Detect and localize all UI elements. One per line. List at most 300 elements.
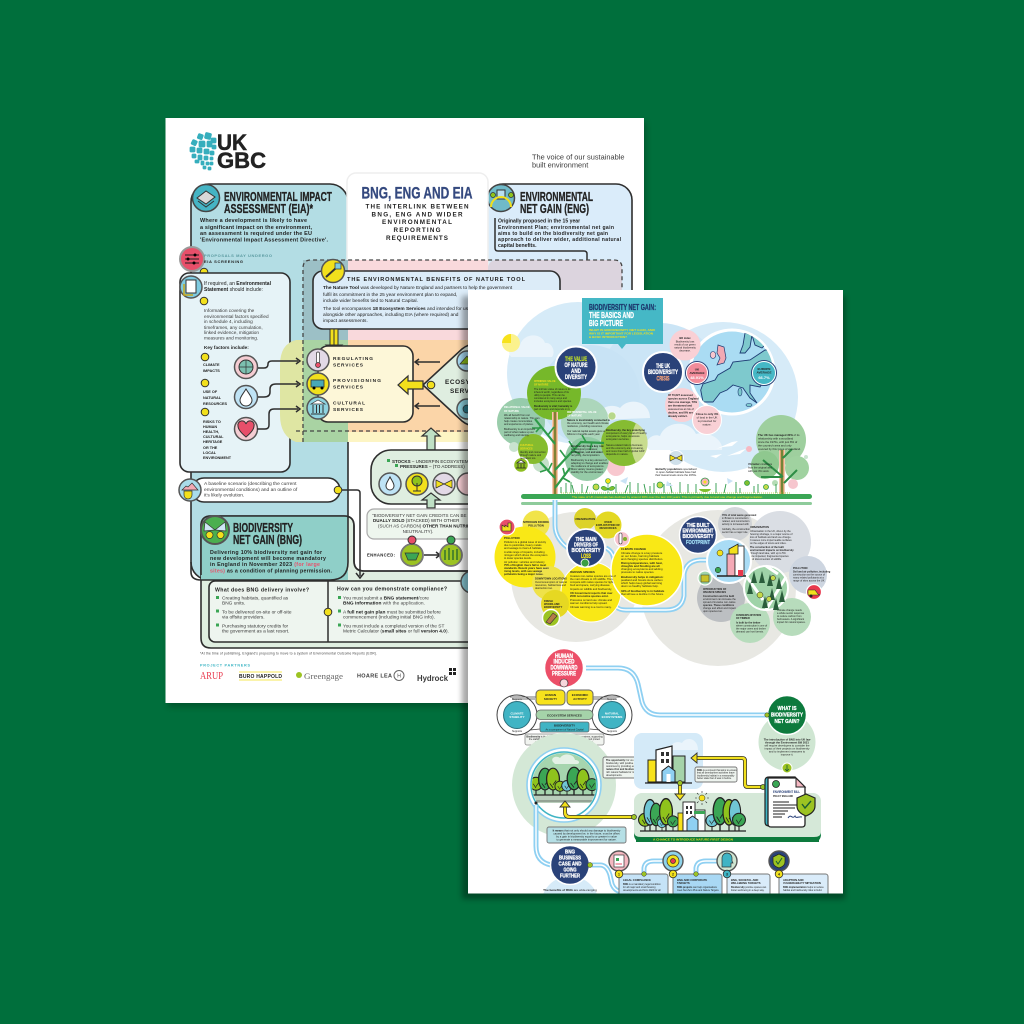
tree: value of nature circles: depends on nature. [606,452,629,456]
text: footprint: and disconnection of wildlife. [750,558,782,561]
heading: BNG [233,520,302,547]
text: drivers: Overconsumption of natural [535,580,567,584]
card: BNG, societal and wellbeing targets: foster well-being in a deep way. [731,889,765,892]
card: BNG and corporate targets: meet Net Zero Plus and Nature Targets. [677,889,720,892]
text: drivers: BIODIVERSITY [544,605,563,609]
text: natural value of nature: utility to people. This can be [534,394,566,397]
callout: credits note: "BIODIVERSITY NET GAIN CREDITS CAN BE [372,513,466,518]
card: legal compliance: BNG is a mandatory legal condition [623,883,661,886]
grey footprint circles [697,507,827,643]
note: biodiversity: the stability of ecosystem services which in turn sustain and protect [529,738,600,741]
text: drivers: peatland and forests store carbon [621,578,663,582]
tree: value of nature circles: Our natural capital assets give us [567,429,606,433]
yellow driver circles [494,508,683,622]
grass and flowers [561,477,790,493]
heading circle: the UK biodiversity crisis: CRISIS [656,376,670,382]
text: baseline: environmental conditions) and an outline of [204,487,298,493]
tree: value of nature circles: We all benefit from our [504,413,530,417]
column: what does BNG delivery involve: the government as a last resort. [222,628,289,634]
text: ENG intro: Environment Plan; environmental net gain [498,225,614,231]
text: statement detail: measures and monitoring. [204,336,258,340]
subtitle: THE INTERLINK BETWEEN [366,204,469,210]
callout: it means [547,827,626,843]
text: footprint: It causes more impermeable surfaces [750,539,792,542]
tree: value of nature circles: ecosystems, helps us access [606,434,640,438]
heading circle: BNG business case and going further: FURTHER [560,874,581,880]
icon: logging [542,610,560,626]
factor: health and heritage: LOCAL [203,451,217,455]
tree: UK managed: The UK has managed 30% of its [758,433,800,437]
text: statement detail: Information covering the [204,308,255,313]
section: value of nature and UK crisis [497,298,812,505]
text: drivers: EXPLOITATION OF [596,523,620,527]
title box: & BASIC INTRODUCTION? [589,335,627,339]
icon: wellbeing head: 3 [726,872,728,876]
logo: UKGBC: GBC [217,148,266,173]
title box: THE BASICS AND [589,310,634,320]
text: drivers: 75% of English rivers fail to meet [504,563,546,567]
text: stocks [387,459,472,469]
text: footprint: Soil and air pollution, including [793,570,831,574]
text: ENG intro: capital benefits. [498,243,537,249]
panel: environmental net gain [488,183,633,290]
tagline [532,154,624,168]
explainer: what is BNG: will require developers to consider the [764,744,810,748]
text: footprint: where construction is one of [736,624,767,628]
heading: EIA: ENVIRONMENTAL IMPACT [224,190,332,204]
ring: climate stability: Supports [512,730,523,733]
heading: BNG: BIODIVERSITY [233,520,293,535]
ring: climate stability: Supports [512,698,523,701]
text: footprint: Climate change needs [777,609,803,612]
text: footprint [703,514,831,634]
tree: value of nature circles: Biodiversity has a key role [571,444,604,448]
text: EIA intro: an assessment is required under the EU [200,231,312,237]
column: how can you demonstrate compliance: You must include a completed version of the ST [343,624,444,630]
text: drivers: Climate change is a key pressure [621,551,663,555]
diagram: enhanced habitats [367,536,462,566]
text: drivers: RESOURCES [599,526,617,530]
tree: value of nature circles: More variety means greater [571,467,603,471]
explainer: what is BNG: through the Environment Bill 2021 [765,740,809,744]
connector dot [334,486,342,494]
service: provisioning: PROVISIONING [333,378,381,384]
text: butterfly population [655,467,697,477]
text: footprint: the major users and timber [736,628,766,630]
text: footprint: sector has a major role. [722,531,748,534]
text: drivers: DOWNTOWN LOCATIONS [535,576,567,580]
partner logos: HOARE LEA [357,674,392,680]
tree: value of nature circles: resilience, providing resources. [567,424,603,428]
heading: project partners: PROJECT PARTNERS [200,664,250,668]
text: footprint: to reduce carbon from [777,615,801,618]
text: BNG intro: in England in November 2023 (for large [210,562,320,568]
text: statement detail [204,308,269,350]
heading circle: human induced downward pressure: DOWNWARD [550,666,578,672]
text: EIA intro: a significant impact on the environment, [200,225,312,231]
text: drivers [504,517,665,609]
text: butterfly population: Butterfly populations specialised [655,467,697,471]
river: blue pipes [555,500,710,610]
service: regulating [307,349,373,371]
factor: natural resources: NATURAL [203,396,222,400]
heading circle: human induced downward pressure [544,648,584,688]
text: drivers: FRESH [544,599,553,603]
service: regulating: SERVICES [333,362,364,368]
text: statement intro: Statement should include: [204,287,263,293]
arrows: small feedback [415,359,440,409]
heading circle: built environment footprint [680,516,716,554]
panel: nature-first banner: A CHANCE TO INTRODUCE NATURE-FIRST DESIGN [653,838,733,842]
factor: natural resources [201,379,258,408]
heading: ENG [520,190,593,216]
box: ecosystem services: ECOSYSTEM SERVICES [547,714,582,718]
clouds [509,335,722,450]
text: footprint: range of sites across the UK [793,580,825,582]
text: drivers: to lower species levels. [504,556,532,560]
explainer: what is BNG: and to implement measures to [769,750,806,754]
text: nature tool: The Nature Tool was developed by Nature England and partners to help the government [323,285,513,291]
heading circle: built environment footprint: FOOTPRINT [686,540,711,546]
panel: environmental statement [180,273,290,472]
column: what does BNG delivery involve: Creating habitats, quantified as [222,596,289,602]
text: natural value of nature: inherent worth, regardless of its [534,391,570,394]
subtitle: ENVIRONMENTAL [382,219,452,226]
card: adaption and vulnerability mitigation: BNG implementation helps to reduce [783,886,824,889]
stat: UK average [686,362,708,384]
facts: pink circles: already extinct. [668,414,688,418]
facts: pink circles: nature. [703,422,712,426]
icon: tractor [806,584,822,600]
text: footprint: Is built by the timber [736,622,760,624]
heading circle: BNG business case and going further: CASE AND [558,862,582,868]
text: footprint: Urbanisation in the UK, driven by the [750,530,791,533]
service: provisioning: SERVICES [333,384,364,390]
column: how can you demonstrate compliance: How can you demonstrate compliance? [337,586,447,592]
icon: sun [502,334,520,352]
tree: value of nature circles: Identity and connection [520,451,546,454]
panel: report title [347,173,488,273]
icon: screening sliders [180,247,204,271]
explainer: what is BNG: The introduction of BNG into UK law [764,738,811,742]
text: drivers: WOODLAND [544,602,560,606]
text: nature tool: fulfil its commitment in the 25 year environment plan to expand, [323,292,457,298]
zone: nature tool overlap regions [280,260,622,442]
callout: the opportunity: biodiversity, with positive [606,762,634,765]
tree: value of nature circles: Biodiversity is an important [504,427,535,431]
card: BNG and corporate targets [642,851,722,896]
text: drivers: due to pesticides, heavy metals [504,543,542,547]
card: BNG, societal and wellbeing targets: WELLBEING TARGETS [731,881,761,885]
panel: biodiversity net gain [191,516,490,648]
text: drivers: Climate warming is a cost to many. [570,605,612,609]
heading: ENG: ENVIRONMENTAL [520,190,593,204]
tree: value of nature circles: ecosystem services. [606,437,630,441]
text: ENG intro: Originally proposed in the 15 year [498,218,580,224]
backdrop: grey circles [511,510,796,666]
box: human society [536,690,565,705]
tagline: The voice of our sustainable [532,152,624,162]
logo: UKGBC: UK [217,130,247,155]
text: BNG intro: sites) as a condition of planning permission. [210,568,333,574]
heading: ENG: NET GAIN (ENG) [520,202,589,216]
partner logos: Greengage [304,671,343,681]
title box: WHY IS IT IMPORTANT FOR LEGISLATION [589,332,653,336]
page: BNG, ENG and EIA poster [166,118,644,703]
tree: UK managed: since the 1970s, with just 8% of [758,440,797,444]
text: drivers: and changing species distribution. [621,557,663,561]
icon: factory [499,519,515,535]
text: drivers: Impacts on wildlife and biodiversity, [570,587,612,591]
card: BNG and corporate targets: BNG AND CORPORATE [677,878,707,882]
facts: pink circles: result of our green [674,342,696,346]
text: statement detail: linked evidence, mitigation [204,330,259,335]
stat: Europe average: 66.7% [758,375,770,380]
text: footprint: The construction of the built [750,546,784,549]
callout: credits note: NEUTRALITY). [403,529,433,534]
callout: the opportunity: The opportunity: for us and [606,759,638,762]
text: footprint: POLLUTION [793,567,808,570]
heading circle: main drivers of biodiversity loss: BIODIVERSITY [572,548,601,554]
heading circle: what is biodiversity net gain [765,696,806,734]
text: drivers: and sewage to rivers & habitats. [504,546,542,550]
facts: pink circles [665,330,722,434]
ring: climate stability: CLIMATE [510,712,524,716]
text: ENG intro [498,218,622,249]
facts: pink circles: Close to only 3% [696,412,719,416]
arrow: stocks from credits [422,493,440,508]
heading: nature tool: THE ENVIRONMENTAL BENEFITS OF NATURE TOOL [347,277,526,283]
text: footprint: OF TIMBER [736,617,750,620]
tree: UK managed: covered by this types of woodland. [758,447,801,451]
heading circle: BNG business case and going further [550,846,592,884]
tree: value of nature circles: Nature-related risks to business [606,443,643,447]
ring: climate stability [497,695,537,735]
heading circle: main drivers of biodiversity loss: THE MAIN [576,537,596,543]
document: environment bill: POLICY ENGLAND [773,794,794,798]
connector dot [427,381,435,389]
text: baseline [204,481,298,498]
text: drivers: changing ecosystems and adding [621,567,663,571]
section: BNG business case [541,846,828,934]
heading circle: main drivers of biodiversity loss: LOSS [581,554,591,560]
tree: UK managed: relationship with a woodland [758,436,794,440]
service: provisioning [307,373,381,395]
icon: compliance [461,571,483,593]
column: what does BNG delivery involve: via offsite providers. [222,614,265,620]
panel: stocks and pressures [371,450,491,504]
text: butterfly population: in open-habitat habitats have had [656,470,696,474]
text: footprint: INVASIVE SPECIES [703,591,726,594]
callout: credits note: (SUCH AS CARBON) OTHER THAN NUTRIENT [378,524,476,528]
callout: BNG is a concept: biodiversity habitat in a measurably [697,774,735,777]
facts: pink circles: assessed as at risk of [668,407,694,411]
subtitle: REPORTING [394,227,441,234]
facts: pink circles: is protected for [698,419,716,423]
text: butterfly population: their lowest levels since the 1970s. [655,473,697,477]
text: natural value of nature [534,380,573,411]
connectors: factors to services [257,358,300,429]
partner logos: ARUP [200,671,223,682]
heading circle: built environment footprint: ENVIRONMENT [682,528,714,534]
callout: it means: It means that not only should any damage to biodiversity [553,828,621,832]
text: natural value of nature: OF NATURE [534,384,549,386]
section: drivers of biodiversity loss [494,500,831,666]
heading circle: the value of nature and diversity: THE VALUE [565,356,587,363]
partner logos: H [397,674,401,680]
text: drivers: POLLUTION [528,524,544,528]
text: drivers: Pressures on land use: climate and [570,598,612,602]
card: legal compliance [609,851,668,898]
panel: delivery and compliance [209,581,490,642]
box: biodiversity: As a component of Natural Capital [545,728,584,732]
text: drivers: pollutants being a major issue. [504,572,544,576]
tree: value of nature circles: stability for the environment. [571,470,604,474]
heading circle: what is biodiversity net gain: BIODIVERSITY [771,712,803,718]
heading circle: human induced downward pressure: PRESSURE [552,672,576,678]
text: drivers: UK Government reports that over [570,591,613,595]
heading: EIA: ASSESSMENT (EIA)* [224,202,313,216]
ring: natural ecosystems: Supports [607,698,618,701]
tree: UK managed: with just 3% stock. [748,469,770,473]
facts: pink circles: BD index [679,336,691,340]
heading circle: built environment footprint: THE BUILT [686,523,710,529]
title box: BIG PICTURE [589,318,623,328]
facts: pink circles: are threatened and [668,404,692,408]
tree: value of nature circles: Nature is inextricably connected to [567,418,611,422]
factor: health and heritage: ENVIRONMENT [203,456,232,460]
tree: value of nature circles: pollination, soil and water [571,450,603,454]
tree: UK managed: 4% better conditions [748,462,773,466]
ring: natural ecosystems: ECOSYSTEMS [602,715,622,719]
tree: value of nature circles: RELATIONAL VALUE [504,405,530,409]
label: ECOSYSTEM [445,379,490,386]
note: biodiversity: business activity and growth as it is regularly provided. [536,741,594,744]
text: drivers: Rising temperatures, with heat, [621,561,663,565]
stat: Europe average: EUROPE [757,367,771,371]
heading circle: human induced downward pressure: HUMAN [555,654,573,660]
explainer circle: benefits of BNG: The benefits of BNG are wide-ranging [543,888,597,892]
column: how can you demonstrate compliance: A full net gain plan must be submitted before [343,610,441,616]
factor: climate impacts: IMPACTS [203,369,220,373]
page: Biodiversity Net Gain basics and big picture [468,290,843,934]
box: economic activity [567,690,593,705]
heading circle: the UK biodiversity crisis: THE UK [656,364,670,370]
text: BNG intro: Delivering 10% biodiversity net gain for [210,550,322,556]
heading circle: BNG business case and going further: GOING [564,868,577,874]
text: statement detail: timeframes, any cumulation, [204,325,263,330]
stat: UK average: 48.91% [690,375,704,380]
panel: ecosystem service types [307,346,413,422]
tree: value of nature circles: relationship to nature. This can [504,416,540,420]
icon: baseline [179,479,201,501]
icon: ENG [488,184,514,212]
tree: value of nature circles: and experience of places. [504,422,534,426]
text: drivers: compete with native species for light, [570,580,614,584]
column: what does BNG delivery involve: BNG units. [222,600,245,606]
box: human society: SOCIETY [544,697,557,701]
text: statement intro: If required, an Environmental [204,281,272,287]
tree: value of nature circles [497,366,648,498]
text: nature tool: alongside other approaches, including EIA (where required) and [323,312,459,318]
text: baseline: it's likely evolution. [204,492,244,498]
text: drivers: destruction too. [535,586,553,590]
text: drivers: standards. Recent years have seen [504,566,549,570]
card: BNG and corporate targets: TARGETS [677,881,690,885]
column: how can you demonstrate compliance: BNG information with the application. [343,600,425,606]
service: cultural: CULTURAL [333,400,365,406]
text: drivers: 2000 non-native species exist. [570,594,609,598]
tree: value of nature circles: and the economy are increasing, [606,446,644,450]
forest globe [512,733,616,837]
heading circle: the value of nature and diversity: AND [571,368,581,375]
callout: BNG is a concept: that all development activities leave [697,772,735,775]
subtitle: BNG, ENG AND WIDER [372,212,463,218]
text: drivers: rising levels, with sea sewage [504,569,543,573]
text: nature tool [323,285,513,324]
text: footprint: INTRODUCTION OF [703,588,727,591]
heading circle: human induced downward pressure: INDUCED [554,660,575,666]
text: ENG intro: approach to deliver wider, additional natural [498,237,622,243]
factor: health and heritage: HERITAGE [203,440,223,444]
callout: the opportunity: rich natural habitats for more [606,771,638,774]
text: natural value of nature: part of nature and depends on it. [534,408,570,411]
stat: Europe average [752,360,776,386]
text: footprint: housing shortage, is a major source of [750,533,793,536]
facts: pink circles: species across England [668,396,699,400]
heading circle: main drivers of biodiversity loss [567,529,605,567]
text: footprint: Globally, the construction [722,528,750,531]
text: footprint: related, and construction [722,520,750,523]
text: footprint: a whole sector response [777,612,805,615]
pill: baseline scenario [179,478,342,502]
text: natural value of nature: includes ecosystems and species. [534,400,572,403]
heading circle: what is biodiversity net gain: NET GAIN? [774,719,800,725]
text: footprint: demand can hurt forests. [736,630,764,634]
map: Europe [690,330,775,414]
arrow: yellow block left [398,376,423,394]
text: drivers: the main threats to UK wildlife. They [570,577,614,581]
icon: butterfly [668,450,684,466]
tree: UK managed: from the original and [748,466,772,470]
partner logos: Hydrock [417,673,448,683]
card: legal compliance: developments and from 2024 for all [623,889,661,892]
text: drivers: A wide range of impacts, including [504,550,545,554]
text: footprint: spread of invasive non-native [703,601,736,604]
tree: value of nature circles: the resilience of ecosystems. [571,464,605,468]
factor: climate impacts: CLIMATE [203,363,220,367]
icon: compliance document: 1 [618,872,620,876]
callout: BNG is a concept [695,767,737,782]
heading circle: the value of nature and diversity: OF NATURE [564,362,588,369]
card: legal compliance: LEGAL COMPLIANCE [623,878,651,882]
column: what does BNG delivery involve: To be delivered on-site or off-site [222,610,292,616]
heading circle: BNG business case and going further: BNG [565,850,575,856]
icons: birds [710,441,746,458]
box: biodiversity: BIODIVERSITY [554,724,575,728]
tree: value of nature circles: Biodiversity, the key underlying [606,428,645,432]
card: adaption and vulnerability mitigation: ADAPTION AND [783,878,804,882]
text: screening: PROPOSALS MAY UNDERGO [204,253,272,258]
arrow: up to dashed zone [422,428,440,450]
tree: value of nature circles: OF NATURE [504,409,519,413]
document: environment bill: ENVIRONMENT BILL [773,790,801,794]
ring: natural ecosystems: NATURAL [605,712,619,716]
partner logos: BURO HAPPOLD [239,674,282,680]
panel: environmental impact assessment [179,184,348,580]
callout: BNG is a concept: better state than it was in before. [697,777,732,780]
factor: health and heritage: HEALTH, [203,430,219,434]
